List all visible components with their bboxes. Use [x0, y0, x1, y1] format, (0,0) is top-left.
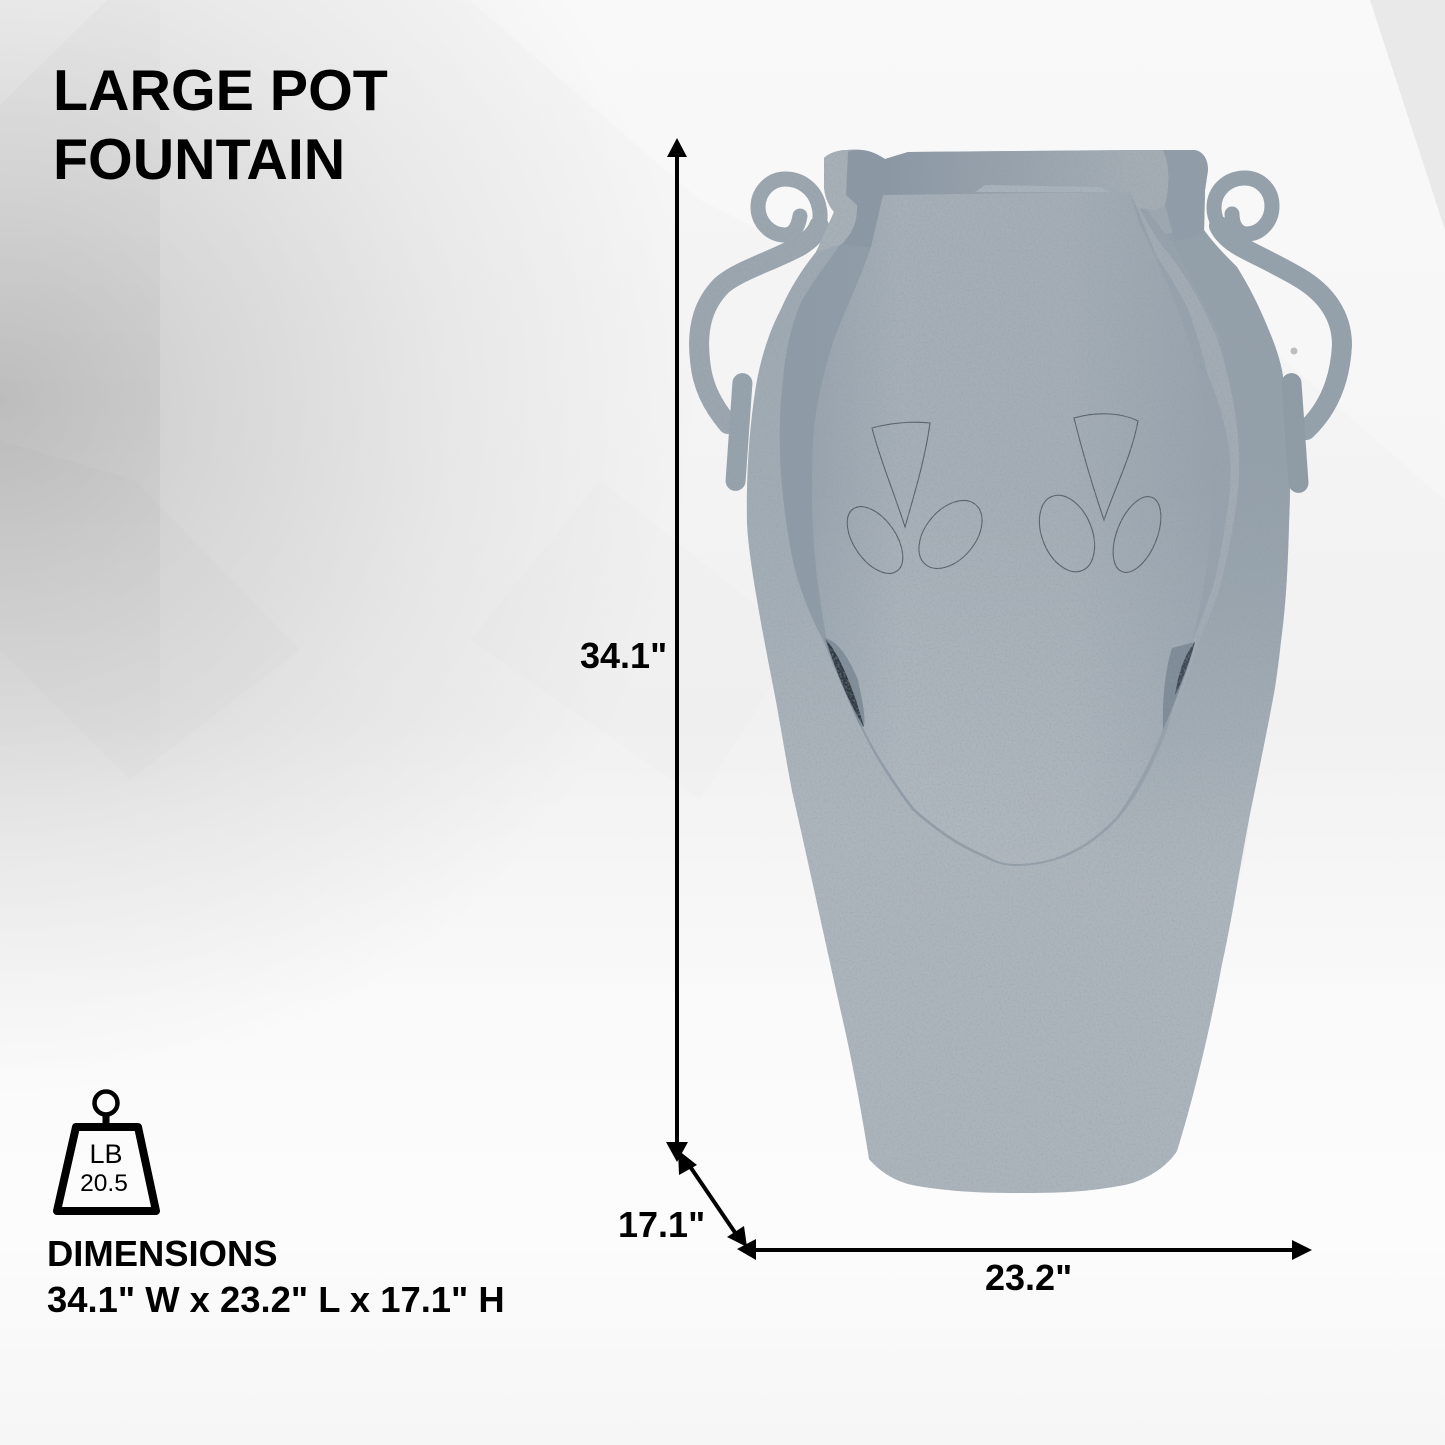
title: [53, 59, 388, 192]
right handle ring: [1281, 372, 1309, 494]
depth arrow: [678, 1150, 747, 1247]
icon: weight 20.5 LB: [57, 1092, 156, 1211]
cavity: dark inner wall: [780, 193, 1238, 866]
left water outlet: [824, 638, 865, 727]
rim: right outer: [1163, 150, 1208, 242]
rim: right block: [1125, 150, 1169, 210]
product photo: large pot fountain: [699, 149, 1342, 1193]
small speck: [1290, 348, 1298, 354]
right motif: [1029, 414, 1171, 580]
height arrow: [666, 138, 688, 1162]
dimensions text: [47, 1233, 505, 1320]
depth label: 17.1": [618, 1204, 705, 1245]
width arrow: [737, 1239, 1312, 1260]
left handle ring: [725, 372, 753, 492]
rim: light patch on back wall: [975, 185, 1110, 192]
icon: weight 20.5 LB: 20.5: [80, 1170, 128, 1197]
width label: 23.2": [985, 1257, 1072, 1298]
right lip highlight: [1133, 197, 1239, 730]
dimensions text: 34.1" W x 23.2" L x 17.1" H: [47, 1279, 505, 1320]
dimensions text: DIMENSIONS: [47, 1233, 278, 1274]
icon: weight 20.5 LB: LB: [89, 1139, 123, 1169]
title: FOUNTAIN: [53, 128, 345, 192]
left handle: [699, 179, 820, 424]
height label: 34.1": [580, 635, 667, 676]
inner vessel surface: [812, 192, 1212, 864]
right water outlet: [1163, 642, 1195, 730]
pot body: [747, 149, 1290, 1193]
left motif: [836, 422, 995, 583]
right outer band upper tone: [1100, 230, 1289, 450]
title: LARGE POT: [53, 59, 388, 123]
rim: back wall: [880, 150, 1135, 195]
right outer band fade: [1100, 450, 1290, 880]
right handle: [1214, 178, 1342, 430]
rim: left light edge: [816, 150, 857, 252]
rim: left dark chunk: [842, 150, 893, 247]
